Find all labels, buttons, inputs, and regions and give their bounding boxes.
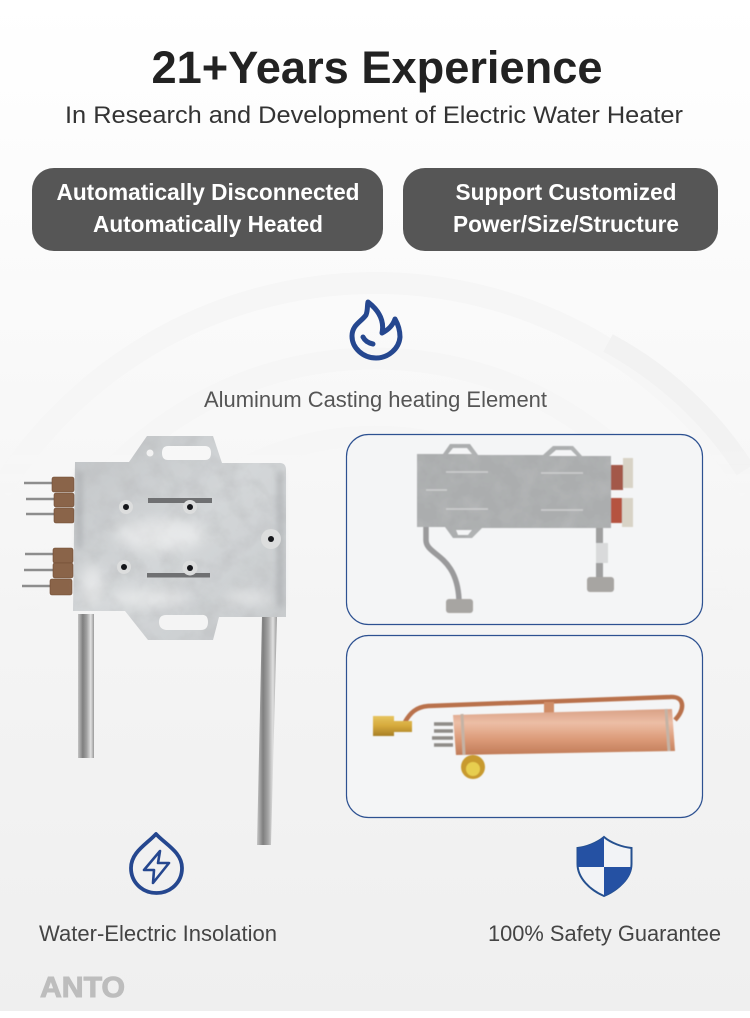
- panel: plate heater photo: [346, 434, 702, 624]
- panel: copper heater photo: [346, 636, 702, 818]
- casting body with brackets: [73, 436, 286, 640]
- pins: [22, 483, 55, 586]
- brass nut: [461, 755, 485, 779]
- badge: customization: Support Customized: [456, 179, 676, 205]
- label: aluminum casting: Aluminum Casting heating Element: [204, 387, 547, 412]
- brass valve: [373, 716, 412, 736]
- copper coil terminals: [50, 477, 74, 595]
- raised slots: [148, 498, 212, 503]
- terminals: [611, 465, 623, 490]
- casting highlights: [81, 519, 274, 606]
- icon: shield: [578, 837, 632, 896]
- coil terminals: [432, 724, 453, 745]
- title: 21+Years Experience: [152, 42, 602, 93]
- badge: auto disconnect: Automatically Disconnected: [56, 179, 360, 205]
- cylinder: [453, 709, 675, 755]
- copper pipe: [405, 697, 682, 722]
- nuts: [446, 599, 473, 613]
- product: aluminum casting heating element: [22, 436, 286, 845]
- pipes: [426, 526, 459, 600]
- label: water-electric insolation: Water-Electric Insolation: [39, 921, 277, 946]
- icon: water drop with bolt: [131, 834, 182, 893]
- badge: customization: Power/Size/Structure: [453, 211, 679, 237]
- label: safety guarantee: 100% Safety Guarantee: [488, 921, 721, 946]
- badge: customization: [403, 168, 718, 251]
- badge: auto disconnect: Automatically Heated: [93, 211, 323, 237]
- casting body: [417, 444, 611, 538]
- right tube: [257, 616, 277, 845]
- badge: auto disconnect: [32, 168, 383, 251]
- brand mark: ANTO: [40, 972, 125, 1004]
- left tube: [78, 614, 94, 758]
- subtitle: In Research and Development of Electric Water Heater: [65, 102, 683, 129]
- casting shading: [77, 472, 283, 607]
- icon: flame: [352, 302, 400, 358]
- screw holes: [117, 500, 281, 576]
- page background: [0, 272, 750, 1011]
